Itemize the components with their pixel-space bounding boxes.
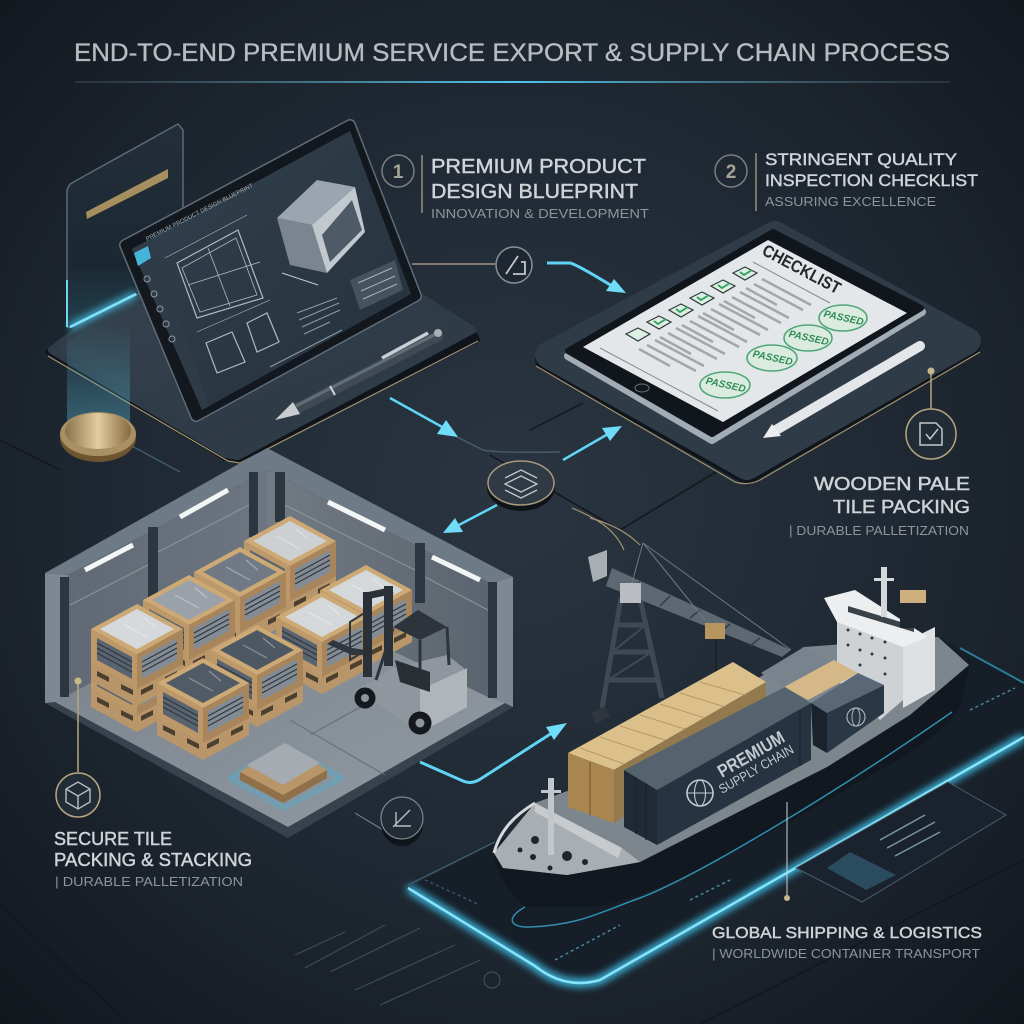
callout: wooden pallet tile packing: TILE PACKING [833,497,970,517]
bridge superstructure [824,567,935,720]
arrow: design to checklist [412,263,626,293]
callout: global shipping: GLOBAL SHIPPING & LOGISTICS [712,925,982,942]
title: END-TO-END PREMIUM SERVICE EXPORT & SUPPLY CHAIN PROCESS [74,39,950,67]
callout: wooden pallet tile packing: | DURABLE PALLETIZATION [789,523,969,538]
tablet: checklist: PASSED [788,329,829,348]
tile crates [91,516,412,760]
hull [494,637,969,907]
icon: pen on circle [381,797,423,846]
callout: global shipping [712,802,982,961]
premium supply chain container [624,687,811,845]
callout: secure tile packing: | DURABLE PALLETIZATION [55,874,243,889]
tablet: checklist [568,232,922,440]
step 2 text: ASSURING EXCELLENCE [765,194,936,209]
glass panel [67,124,183,327]
icon: design tools [496,247,532,283]
HUD data panel [796,782,1006,902]
background circuit lines [0,403,1024,1024]
deck [494,637,969,875]
tablet: checklist: PASSED [823,309,864,328]
digital shipping platform [408,637,1024,985]
gold disc with light beam [60,327,136,462]
step 2 text: STRINGENT QUALITY [765,150,957,169]
tablet: product blueprint [125,125,416,416]
step 1 text: PREMIUM PRODUCT [431,156,646,178]
stylus [763,346,920,438]
premium supply chain container: PREMIUM [714,727,788,781]
step 1 text: DESIGN BLUEPRINT [431,181,638,203]
forklift [327,586,467,734]
rear containers [761,647,884,753]
flow arrows: centre hub [390,398,624,550]
floor seams [290,685,400,775]
step 2 text: INSPECTION CHECKLIST [765,171,978,190]
panel: design platform [47,124,478,463]
cargo ship [494,567,969,927]
passed stamps [700,305,867,398]
checkboxes [626,267,757,341]
data readouts [295,925,500,1005]
blueprint drawings [165,215,279,373]
warehouse ceiling lights [85,490,480,580]
callout: wooden pallet tile packing: WOODEN PALE [814,474,970,494]
step 1 text: 1 [393,162,404,183]
tablet: checklist: CHECKLIST [759,241,844,298]
step 2 text: 2 [726,162,736,183]
crane [588,518,791,724]
callout: secure tile packing: SECURE TILE [54,829,172,849]
tablet: product blueprint: PREMIUM PRODUCT DESIGN BLUEPRINT [145,183,255,243]
callout: wooden pallet tile packing [789,368,970,538]
step 2 text [715,150,978,211]
3D product cube [277,180,365,273]
wall panel seams [70,505,488,610]
panel: inspection platform [536,232,980,484]
glowing tile pallet [230,743,342,808]
pen [275,329,442,420]
tablet: checklist: PASSED [705,376,746,395]
tan container [568,662,766,823]
callout: secure tile packing: PACKING & STACKING [54,850,252,870]
tablet: checklist: PASSED [752,349,793,368]
callout: global shipping: | WORLDWIDE CONTAINER TRANSPORT [712,946,980,961]
callout: secure tile packing [54,678,252,889]
bow mast and deck equipment [518,778,588,870]
step 1 text [382,155,649,221]
wake glow [512,712,952,927]
panel: warehouse [45,448,513,838]
premium supply chain container: SUPPLY CHAIN [716,742,796,797]
step 1 text: INNOVATION & DEVELOPMENT [431,206,649,221]
arrow: warehouse to ship [355,723,567,830]
icon: central layers hub [487,461,555,511]
